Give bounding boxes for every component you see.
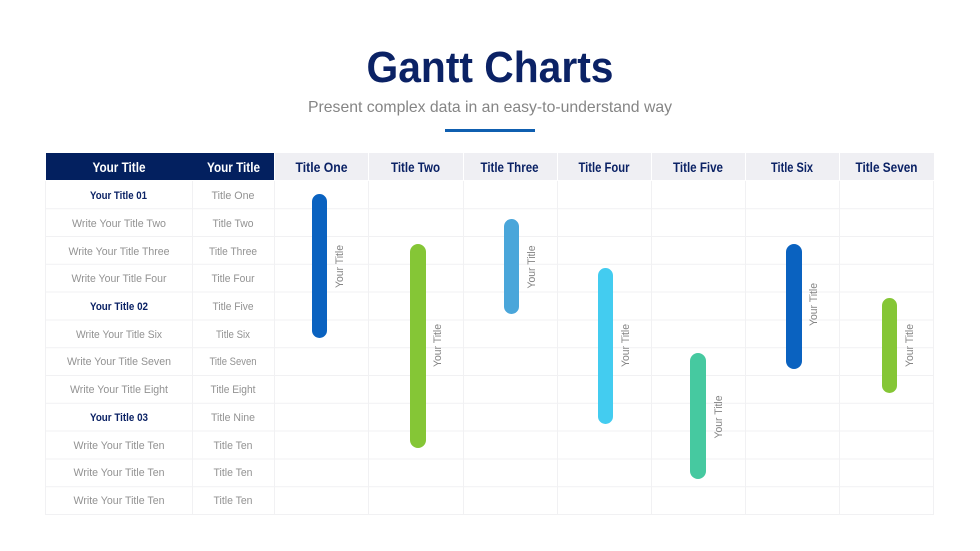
gantt bar: Title Six: Your Title xyxy=(808,283,820,326)
subtitle: Present complex data in an easy-to-understand way xyxy=(308,99,672,116)
task titles column: Title Ten xyxy=(214,440,252,452)
gantt bar: Title Four: Your Title xyxy=(620,324,632,367)
gantt bar: Title Three: Your Title xyxy=(526,246,538,288)
gantt bar: Title Two xyxy=(410,244,444,448)
header labels xyxy=(92,160,918,175)
header: light date cells xyxy=(275,153,934,180)
table grid xyxy=(46,181,934,514)
task names column: Write Your Title Four xyxy=(72,273,167,285)
header labels: Title Three xyxy=(480,160,539,175)
task titles column: Title Seven xyxy=(210,356,256,368)
header labels: Title Four xyxy=(578,160,630,175)
task names column: Write Your Title Six xyxy=(76,329,162,341)
header labels: Your Title xyxy=(207,160,260,175)
task names column: Write Your Title Eight xyxy=(70,384,168,396)
task titles column: Title Nine xyxy=(211,412,255,424)
gantt bar: Title Five: Your Title xyxy=(713,396,725,438)
table header xyxy=(46,153,934,180)
task names column: Your Title 02 xyxy=(90,301,148,313)
task titles column: Title Two xyxy=(212,218,254,230)
task titles column: Title Three xyxy=(209,246,257,258)
task names column: Write Your Title Ten xyxy=(74,440,164,452)
gantt bar: Title One: Your Title xyxy=(334,245,346,288)
gantt bar: Title Five xyxy=(690,353,725,479)
gantt bar: Title Three xyxy=(504,219,538,314)
gantt bar: Title Two: Your Title xyxy=(432,324,444,367)
header labels: Title Six xyxy=(771,160,813,175)
task names column: Write Your Title Two xyxy=(72,218,166,230)
header labels: Title Seven xyxy=(856,160,918,175)
header labels: Title Two xyxy=(391,160,440,175)
gantt bar: Title Six xyxy=(786,244,820,369)
task titles column: Title Four xyxy=(212,273,255,285)
gantt bar: Title One xyxy=(312,194,346,338)
task titles column: Title Ten xyxy=(214,467,252,479)
task names column xyxy=(67,190,171,507)
gantt bar: Title Four xyxy=(598,268,632,424)
gantt bar: Title Seven: Your Title xyxy=(904,324,916,367)
header labels: Your Title xyxy=(92,160,146,175)
task titles column: Title Ten xyxy=(214,495,252,507)
title: Gantt Charts xyxy=(366,43,614,92)
task titles column: Title Five xyxy=(212,301,254,313)
title underline xyxy=(445,129,535,132)
header labels: Title Five xyxy=(673,160,723,175)
gantt bar: Title Seven xyxy=(882,298,916,393)
task titles column xyxy=(209,190,257,507)
header: dark label cells xyxy=(46,153,274,180)
task names column: Write Your Title Ten xyxy=(74,467,164,479)
task titles column: Title Eight xyxy=(210,384,256,396)
task titles column: Title Six xyxy=(216,329,250,341)
task names column: Your Title 03 xyxy=(90,412,148,424)
task titles column: Title One xyxy=(212,190,254,202)
task names column: Your Title 01 xyxy=(90,190,147,202)
task names column: Write Your Title Ten xyxy=(74,495,164,507)
task names column: Write Your Title Three xyxy=(68,246,170,258)
task names column: Write Your Title Seven xyxy=(67,356,171,368)
header labels: Title One xyxy=(296,160,348,175)
